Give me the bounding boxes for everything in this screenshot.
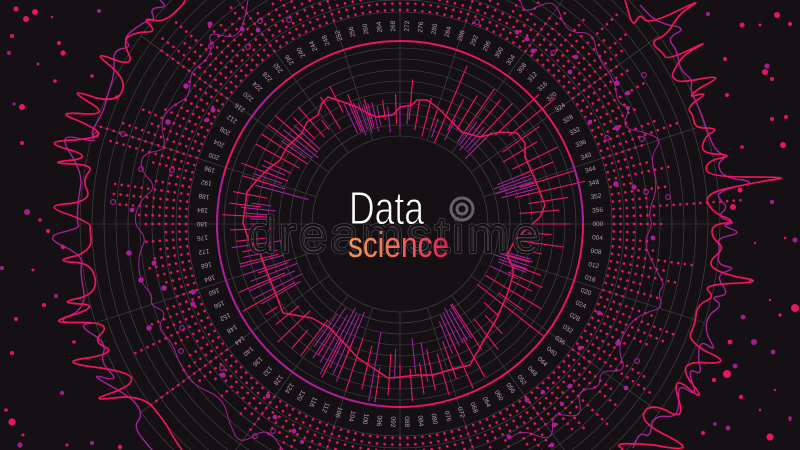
degree labels: 296 [482, 40, 493, 53]
degree labels: 064 [481, 396, 492, 409]
degree labels: 076 [443, 410, 452, 423]
degree labels: 140 [241, 345, 254, 357]
degree labels: 320 [546, 91, 559, 103]
degree labels: 116 [307, 396, 318, 408]
degree labels: 324 [554, 102, 567, 114]
degree labels: 236 [284, 53, 296, 66]
degree labels: 216 [233, 101, 247, 113]
degree labels: 088 [403, 416, 410, 428]
degree labels: 340 [580, 151, 593, 162]
degree labels: 176 [196, 233, 208, 241]
title: science: science [348, 224, 449, 265]
degree labels: 288 [457, 29, 467, 42]
degree labels: 148 [225, 323, 238, 335]
degree labels: 036 [553, 335, 567, 347]
degree labels: 108 [333, 406, 343, 419]
degree labels: 308 [516, 62, 529, 75]
degree labels: 260 [362, 23, 370, 35]
degree labels: 084 [416, 415, 424, 427]
icon: watermark spiral [451, 198, 473, 220]
degree labels: 164 [203, 273, 216, 283]
degree labels: 332 [569, 126, 582, 137]
degree labels: 356 [592, 207, 604, 215]
degree labels: 104 [347, 410, 356, 422]
degree labels: 300 [494, 46, 505, 59]
degree labels: 152 [218, 311, 231, 322]
degree labels [196, 20, 604, 428]
degree labels: 160 [207, 286, 220, 297]
degree labels: 112 [320, 401, 331, 414]
degree labels: 048 [526, 365, 539, 378]
degree labels: 008 [590, 248, 602, 256]
degree labels: 316 [536, 80, 549, 93]
degree labels: 208 [219, 125, 232, 136]
degree labels: 220 [242, 90, 255, 103]
degree labels: 268 [390, 20, 397, 32]
degree labels: 016 [584, 274, 597, 284]
inner pink waveform [243, 97, 545, 378]
degree labels: 352 [590, 193, 602, 201]
degree labels: 252 [334, 29, 344, 42]
degree labels: 196 [203, 164, 216, 174]
degree labels: 004 [592, 234, 604, 242]
degree labels: 188 [198, 192, 210, 200]
degree labels: 224 [251, 80, 264, 92]
degree labels: 184 [196, 206, 208, 214]
degree labels: 168 [200, 260, 212, 269]
degree labels: 348 [588, 179, 600, 188]
watermark: dreamstime: dreamstime [248, 207, 540, 263]
mid purple waveform [135, 0, 663, 450]
degree labels: 212 [226, 113, 239, 124]
degree labels: 012 [588, 261, 600, 270]
degree labels: 280 [430, 23, 439, 35]
degree labels: 120 [295, 389, 306, 402]
degree labels: 204 [213, 137, 226, 148]
degree labels: 020 [580, 287, 593, 297]
circular grid [80, 0, 720, 450]
degree labels: 344 [584, 165, 597, 175]
degree labels: 060 [493, 389, 504, 402]
main ring [217, 41, 583, 407]
degree labels: 080 [430, 413, 438, 425]
filled purple nodes [126, 21, 655, 447]
degree labels: 096 [375, 415, 383, 427]
degree labels: 024 [574, 300, 587, 311]
degree labels: 328 [562, 113, 575, 125]
degree labels: 044 [536, 356, 549, 368]
degree labels: 172 [198, 247, 210, 255]
ring purple nodes [94, 18, 670, 438]
degree labels: 248 [321, 34, 332, 47]
degree labels: 284 [444, 26, 453, 38]
degree labels: 192 [200, 178, 212, 187]
degree labels: 200 [207, 151, 220, 161]
degree labels: 292 [469, 34, 480, 47]
degree labels: 276 [417, 21, 425, 33]
degree labels: 304 [505, 53, 517, 67]
degree labels: 040 [545, 345, 558, 358]
degree labels: 228 [261, 70, 274, 83]
degree labels: 272 [404, 20, 411, 32]
degree labels: 092 [389, 416, 396, 428]
watermark: dreamstime: dreamstime [248, 207, 540, 263]
degree labels: 264 [376, 21, 384, 33]
degree labels: 000 [593, 221, 604, 228]
degree labels: 032 [561, 324, 574, 335]
degree labels: 136 [251, 355, 264, 368]
degree labels: 336 [575, 138, 588, 149]
inner pink spikes [222, 66, 585, 402]
degree labels: 232 [272, 61, 285, 74]
degree labels: 100 [361, 413, 370, 425]
inner purple spikes [232, 102, 537, 401]
degree labels: 128 [271, 373, 284, 386]
degree labels: 240 [296, 46, 307, 59]
degree labels: 156 [212, 299, 225, 310]
degree labels: 256 [348, 25, 357, 38]
degree labels: 244 [308, 39, 319, 52]
degree labels: 072 [456, 406, 466, 419]
degree labels: 144 [233, 334, 246, 346]
degree labels: 056 [504, 382, 516, 395]
degree labels: 052 [515, 374, 528, 387]
degree labels: 028 [568, 312, 581, 323]
title: Data: Data [349, 182, 424, 234]
degree labels: 312 [527, 71, 539, 84]
degree labels: 068 [468, 401, 479, 414]
degree labels: 180 [196, 220, 207, 227]
degree labels: 124 [283, 381, 295, 395]
degree labels: 132 [261, 364, 273, 377]
